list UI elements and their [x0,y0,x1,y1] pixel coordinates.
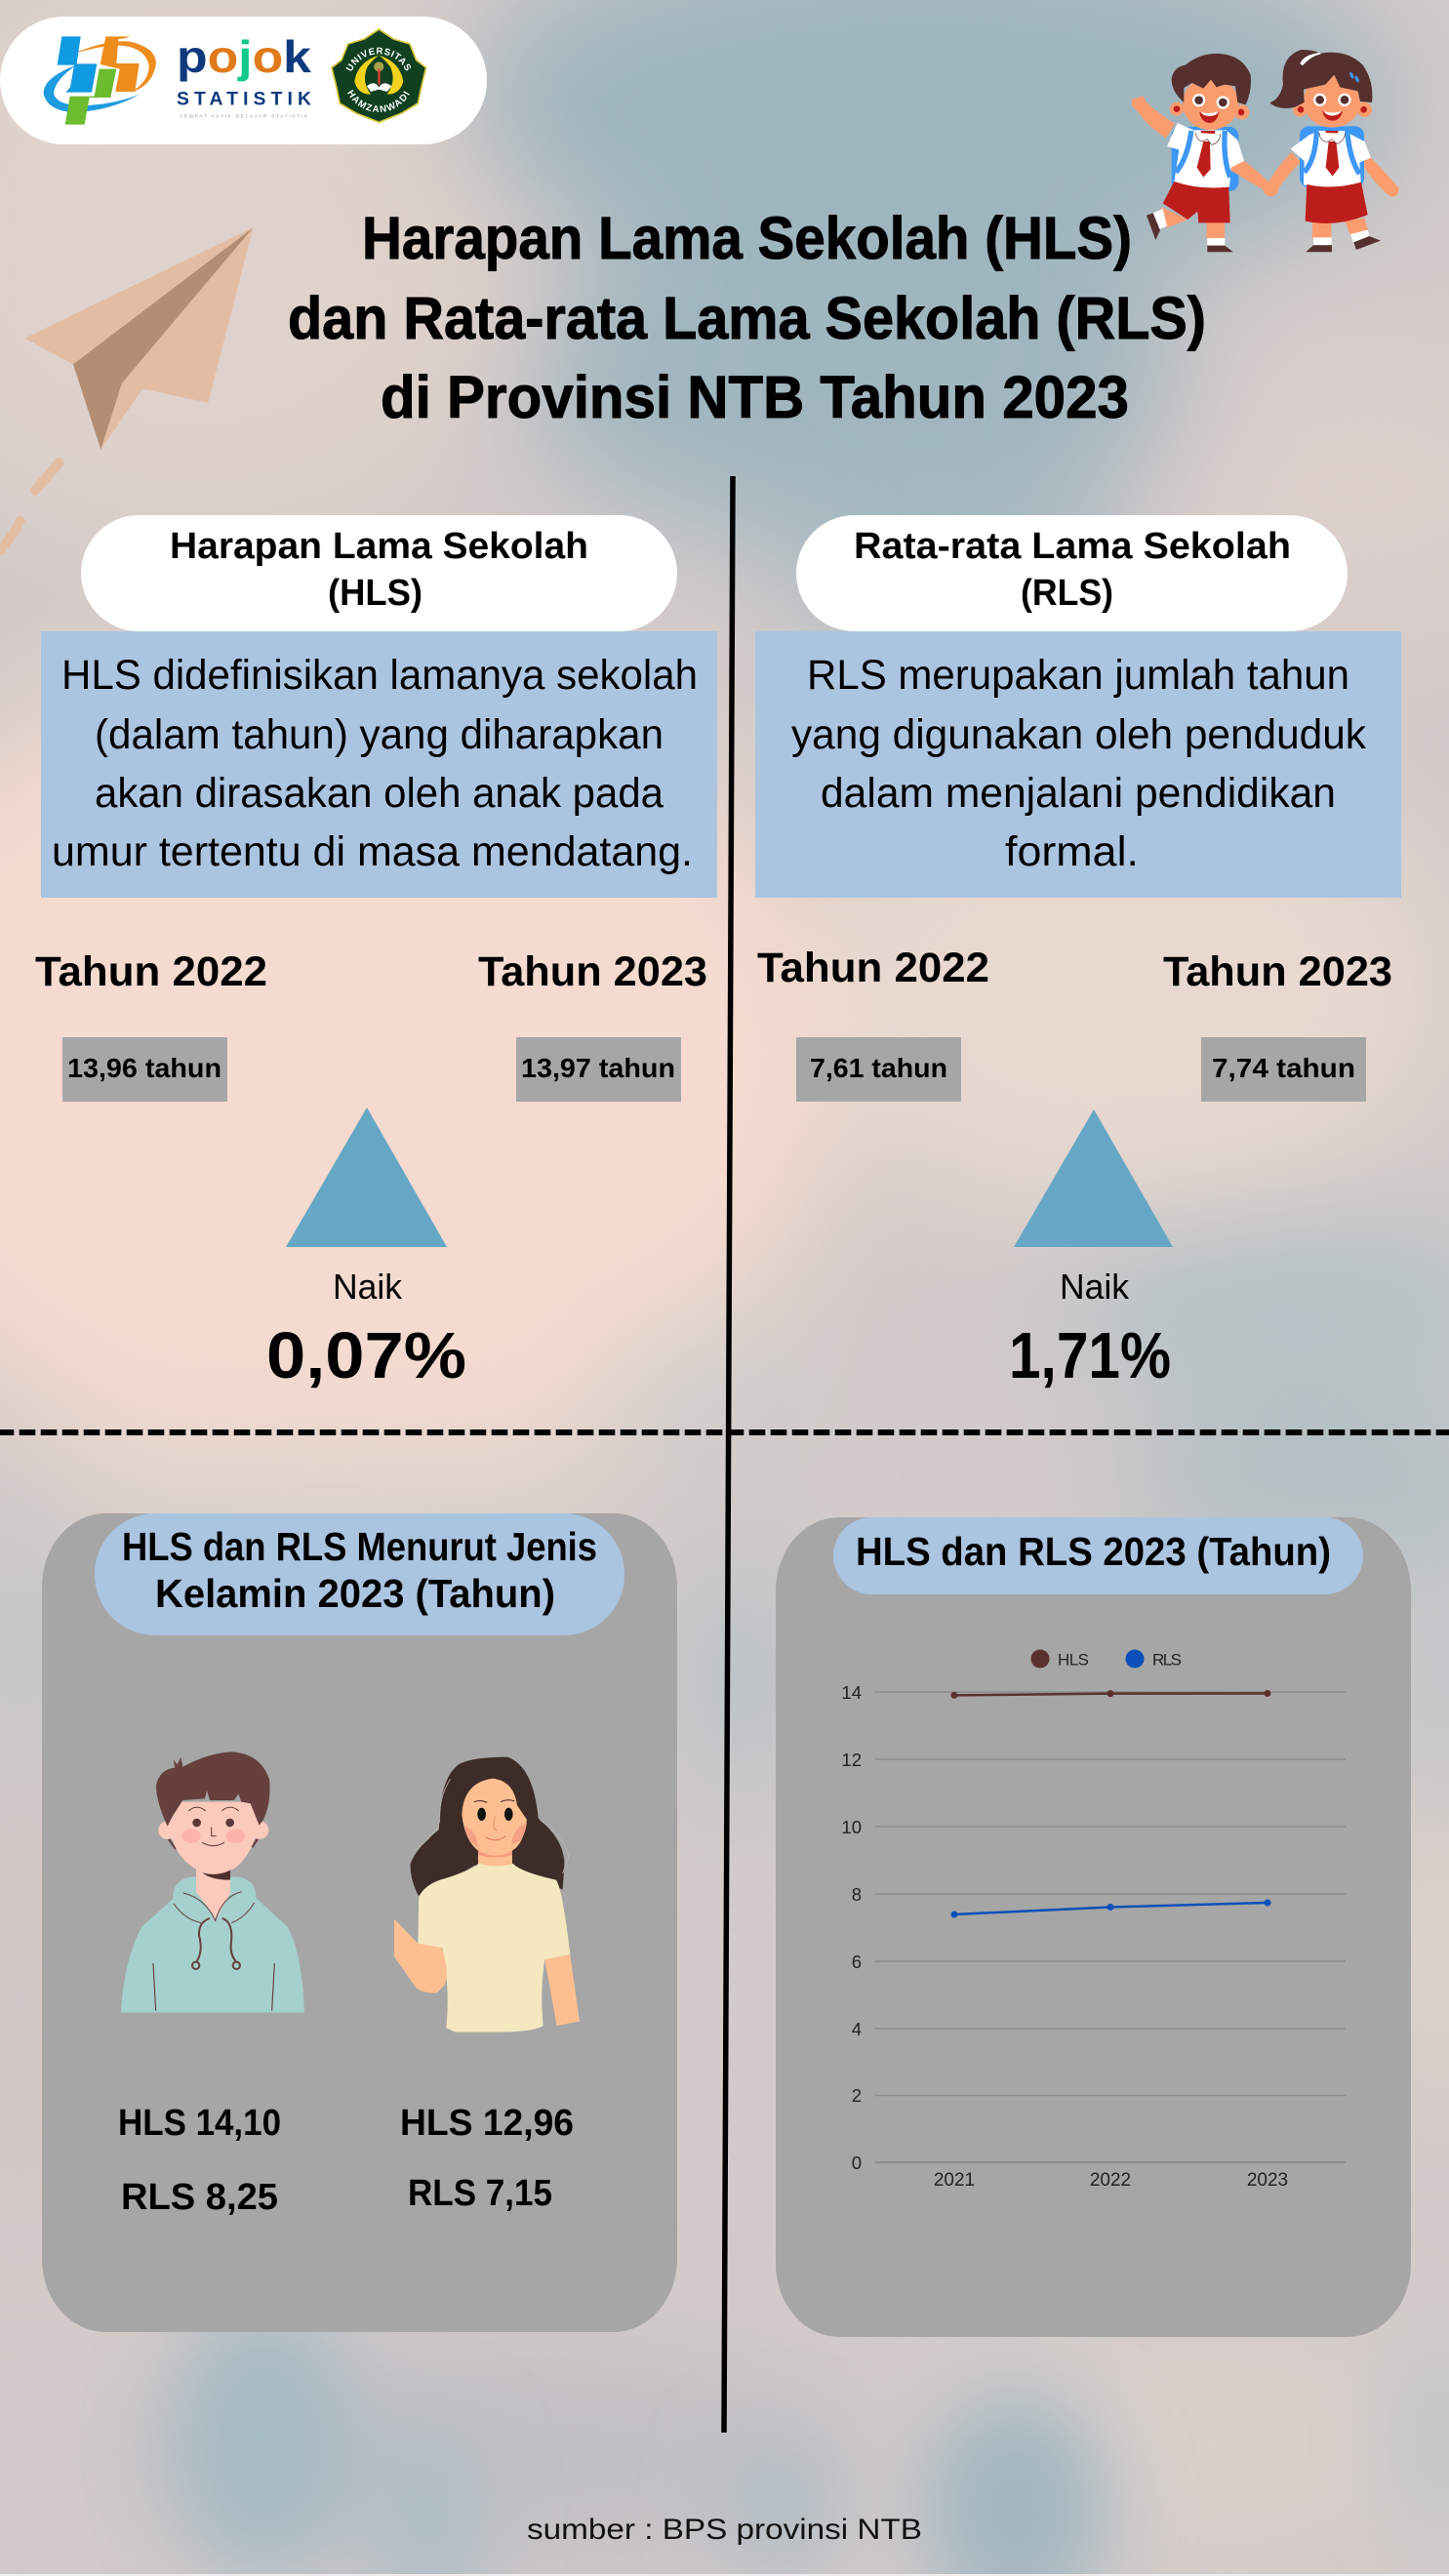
stat: female values: RLS 7,15 [408,2173,552,2214]
icon: Universitas Hamzanwadi emblem [331,28,427,123]
stat: RLS change [1009,1267,1171,1392]
series: RLS [950,1899,1270,1918]
text block: HLS description: (dalam tahun) yang diharapkan [95,711,664,758]
heading: RLS pill: Rata-rata Lama Sekolah [854,526,1291,567]
stat: male values: HLS 14,10 [118,2103,281,2144]
stat: RLS change: Naik [1060,1267,1130,1307]
stat: HLS 2022: 13,96 tahun [67,1053,221,1083]
title: dan Rata-rata Lama Sekolah (RLS) [288,285,1206,351]
stat: HLS 2022: Tahun 2022 [35,948,267,995]
legend: RLS [1152,1651,1182,1669]
stat: female values: HLS 12,96 [400,2103,574,2144]
heading: gender panel [95,1513,624,1635]
stat: RLS change: 1,71% [1009,1319,1171,1392]
y axis labels: 8 [852,1884,862,1905]
icon: pojok statistik wordmark: pojok [177,31,311,82]
panel: HLS RLS by gender [42,1513,677,2332]
horizontal dashed divider [0,1429,1449,1435]
text block: HLS description: umur tertentu di masa mendatang. [52,828,693,875]
y axis labels: 12 [841,1750,862,1770]
y axis labels: 6 [852,1952,862,1972]
illustration: paper airplane [0,227,253,551]
icon: pojok statistik wordmark [177,31,311,120]
y axis labels [841,1682,862,2173]
stat: RLS 2022: Tahun 2022 [757,945,989,991]
stat: male values [118,2103,281,2218]
y axis labels: 2 [852,2085,862,2106]
legend: HLS [1058,1651,1089,1669]
x axis labels [934,2170,1288,2191]
icon: pojok statistik wordmark: TEMPAT ASYIK BELAJAR STATISTIK [180,114,308,120]
x axis labels: 2021 [934,2170,975,2191]
panel: RLS definition [755,515,1401,1392]
stat: RLS 2022: 7,61 tahun [810,1053,947,1083]
text block: HLS description: akan dirasakan oleh anak pada [95,770,664,817]
stat: HLS change: 0,07% [266,1319,466,1392]
text block: RLS description [755,631,1401,898]
text block: RLS description: dalam menjalani pendidikan [821,770,1336,817]
stat: RLS 2023 [1163,948,1392,1102]
title: di Provinsi NTB Tahun 2023 [381,364,1129,430]
x axis labels: 2022 [1090,2170,1131,2191]
line chart [841,1649,1346,2191]
heading: RLS pill: (RLS) [1021,573,1113,614]
heading: chart panel: HLS dan RLS 2023 (Tahun) [856,1529,1331,1574]
heading: gender panel: Kelamin 2023 (Tahun) [155,1571,555,1616]
illustration: school children [1132,50,1399,252]
heading: HLS pill [81,515,677,631]
vertical divider [724,476,733,2433]
icon: up triangle [286,1107,447,1247]
stat: RLS 2022 [757,945,989,1102]
heading: RLS pill [796,515,1348,631]
text block: HLS description: HLS didefinisikan lamanya sekolah [61,652,698,699]
text block: RLS description: formal. [1005,828,1139,875]
text block: HLS description [41,631,717,898]
icon: up triangle [1014,1109,1173,1247]
stat: HLS 2023: 13,97 tahun [521,1053,675,1083]
stat: HLS 2023 [478,948,707,1102]
heading: gender panel: HLS dan RLS Menurut Jenis [122,1524,597,1569]
y axis labels: 4 [852,2019,862,2039]
heading: chart panel [833,1517,1363,1594]
heading: HLS pill: Harapan Lama Sekolah [170,526,588,567]
y axis labels: 0 [852,2153,862,2173]
icon: pojok statistik wordmark: STATISTIK [177,89,311,109]
icon: Universitas Hamzanwadi emblem: HAMZANWADI [347,90,410,113]
boy [1132,54,1269,252]
title [288,205,1206,430]
y axis labels: 10 [841,1817,862,1837]
illustration: boy [121,1751,304,2013]
title: Harapan Lama Sekolah (HLS) [362,205,1132,271]
heading: HLS pill: (HLS) [328,573,423,614]
stat: HLS 2022 [35,948,267,1102]
x axis labels: 2023 [1247,2170,1288,2191]
illustration: woman [394,1757,580,2033]
stat: HLS change [266,1267,466,1392]
stat: HLS change: Naik [333,1267,403,1307]
icon: Universitas Hamzanwadi emblem: UNIVERSITAS [345,47,412,70]
source note: sumber : BPS provinsi NTB [527,2514,922,2546]
series: HLS [950,1690,1270,1699]
girl [1263,50,1399,252]
panel: HLS RLS trend chart [776,1517,1411,2337]
stat: RLS 2023: 7,74 tahun [1212,1053,1355,1083]
stat: female values [400,2103,574,2214]
text block: RLS description: yang digunakan oleh penduduk [791,711,1366,758]
stat: RLS 2023: Tahun 2023 [1163,948,1392,995]
panel: HLS definition [35,515,717,1392]
stat: HLS 2023: Tahun 2023 [478,948,707,995]
stat: male values: RLS 8,25 [121,2177,278,2218]
logo pill [0,17,487,144]
text block: RLS description: RLS merupakan jumlah tahun [807,652,1349,699]
legend [1030,1649,1182,1669]
y axis labels: 14 [841,1682,862,1703]
icon: BPS logo [44,36,156,125]
